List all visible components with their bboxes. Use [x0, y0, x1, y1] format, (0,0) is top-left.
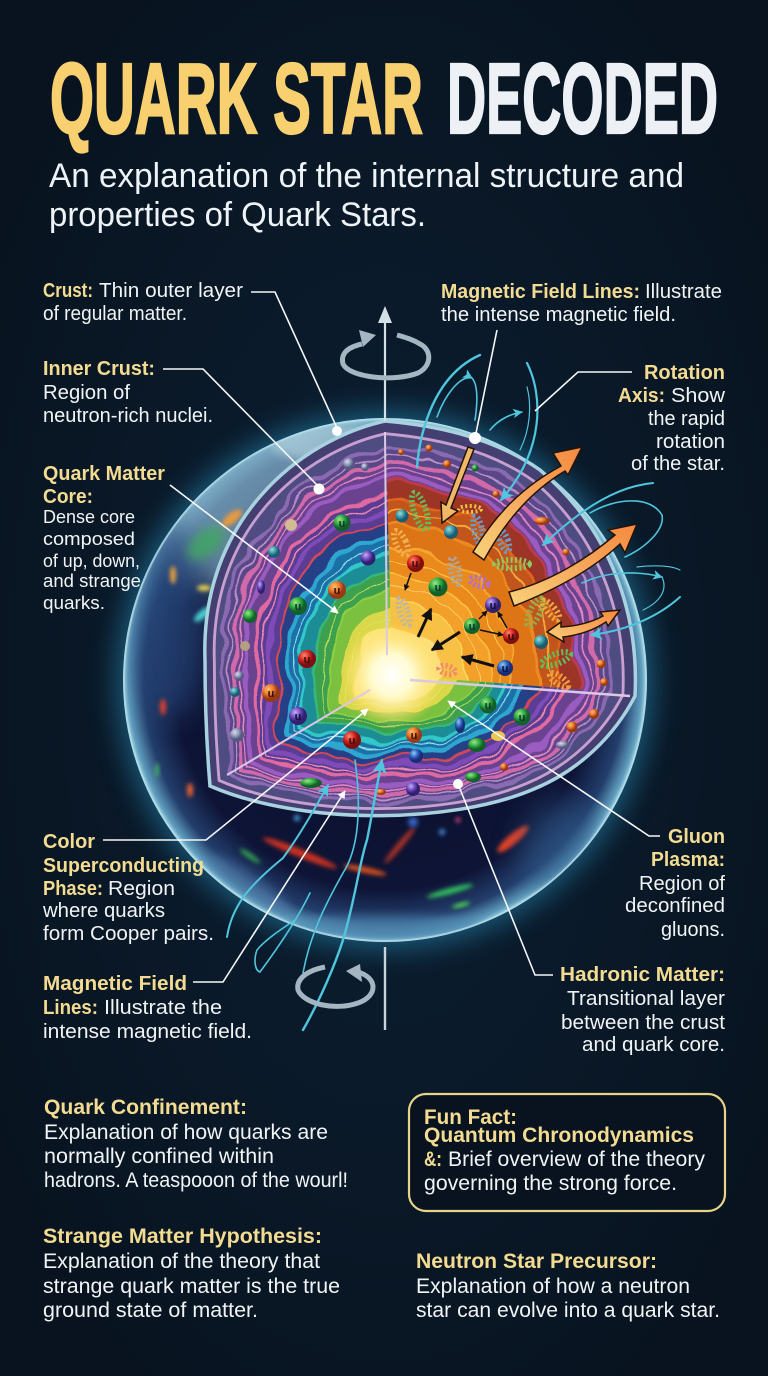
- upper magnetic field leader: [469, 330, 497, 444]
- label: quark matter core: Core:: [43, 486, 93, 508]
- label: inner crust: [43, 358, 213, 427]
- lower magnetic field leader: [193, 791, 345, 982]
- box text: [424, 1106, 706, 1195]
- note: quark confinement: Quark Confinement:: [44, 1096, 247, 1119]
- label: quark matter core: composed: [43, 529, 135, 549]
- label: quark matter core: of up, down,: [43, 551, 140, 571]
- upper rotation ring: [342, 330, 429, 378]
- note: quark confinement: [44, 1096, 348, 1192]
- note: strange matter hypothesis: Explanation of the theory that: [43, 1250, 320, 1273]
- particle letters: u: [268, 688, 274, 700]
- box text: Brief overview of the theory: [448, 1148, 706, 1171]
- note: quark confinement: hadrons. A teaspooon of the wourl!: [44, 1169, 348, 1192]
- particle letters: [268, 518, 525, 747]
- label: crust: Thin outer layer: [99, 280, 243, 302]
- gluon ribbons: [391, 491, 572, 690]
- particle letters: u: [485, 700, 491, 712]
- label: crust: [43, 280, 243, 325]
- crust leader: [251, 292, 342, 436]
- label: magnetic field lines right: [441, 281, 722, 326]
- star cross-section illustration: [117, 355, 680, 1030]
- label: gluon plasma: deconfined: [625, 895, 725, 917]
- note: strange matter hypothesis: [43, 1225, 340, 1322]
- label: inner crust: Region of: [43, 382, 130, 404]
- cut-away wedge: [205, 421, 635, 816]
- double-headed arrow: [547, 610, 620, 642]
- rotation axis leader: [535, 372, 632, 411]
- particle letters: u: [349, 735, 355, 747]
- particle letters: u: [339, 518, 345, 530]
- label: magnetic field lines left: [43, 973, 252, 1043]
- box text: Fun Fact:: [424, 1106, 517, 1129]
- label: inner crust: Inner Crust:: [43, 358, 155, 380]
- note: quark confinement: normally confined within: [44, 1145, 274, 1168]
- label: hadronic matter: Transitional layer: [567, 988, 725, 1010]
- outer glow: [117, 412, 653, 948]
- label: hadronic matter: and quark core.: [582, 1034, 725, 1056]
- particle letters: u: [334, 585, 340, 597]
- label: magnetic field lines left: intense magnetic field.: [43, 1021, 252, 1043]
- label: quark matter core: Dense core: [43, 507, 135, 527]
- label: color superconducting phase: Phase:: [43, 878, 103, 900]
- particle letters: u: [519, 712, 525, 724]
- particle letters: u: [508, 631, 514, 643]
- label: magnetic field lines left: Lines:: [43, 997, 98, 1019]
- label: magnetic field lines left: Magnetic Field: [43, 973, 187, 995]
- black interaction arrows: [405, 573, 507, 666]
- wedge rim: [205, 421, 635, 816]
- label: magnetic field lines right: the intense magnetic field.: [441, 304, 676, 326]
- label: quark matter core: and strange: [43, 571, 141, 591]
- particle letters: u: [502, 663, 508, 675]
- label: crust: of regular matter.: [43, 303, 187, 325]
- label: quark matter core: [43, 463, 165, 613]
- leader lines: [103, 292, 660, 982]
- note: strange matter hypothesis: ground state of matter.: [43, 1299, 258, 1322]
- particle letters: u: [295, 711, 301, 723]
- label: magnetic field lines right: Illustrate: [645, 281, 722, 303]
- lower jet arrow: [509, 524, 637, 606]
- note: neutron star precursor: [416, 1250, 720, 1322]
- box text: Quantum Chronodynamics: [424, 1124, 694, 1147]
- rotation axis with rotation rings: [298, 306, 429, 1030]
- particle letters: u: [411, 730, 417, 742]
- swirling layers: [224, 446, 611, 802]
- label: rotation axis: Show: [671, 385, 726, 407]
- note: strange matter hypothesis: strange quark matter is the true: [43, 1275, 340, 1298]
- label: gluon plasma: gluons.: [661, 919, 725, 941]
- label: color superconducting phase: Superconducting: [43, 855, 204, 877]
- note: quark confinement: Explanation of how quarks are: [44, 1121, 328, 1144]
- note: neutron star precursor: star can evolve into a quark star.: [416, 1299, 720, 1322]
- quark matter core leader: [170, 485, 338, 613]
- label: inner crust: neutron-rich nuclei.: [43, 405, 213, 427]
- orange hot sector: [387, 476, 584, 690]
- label: hadronic matter: Hadronic Matter:: [560, 964, 725, 986]
- title: QUARK STAR: [50, 43, 423, 155]
- axis upper segment: [378, 306, 392, 421]
- particle letters: u: [412, 558, 418, 570]
- inner crust leader: [163, 369, 324, 494]
- label: color superconducting phase: [42, 831, 214, 945]
- particle letters: u: [435, 582, 441, 594]
- sphere shell: [123, 415, 647, 942]
- label: quark matter core: Quark Matter: [43, 463, 165, 485]
- upper jet arrow: [473, 447, 582, 560]
- label: hadronic matter: between the crust: [561, 1012, 725, 1034]
- subtitle: An explanation of the internal structure and: [49, 157, 684, 195]
- box outline: [409, 1094, 725, 1211]
- box text: governing the strong force.: [424, 1172, 677, 1195]
- color superconducting leader: [103, 709, 368, 840]
- label: gluon plasma: [625, 826, 725, 941]
- label: gluon plasma: Gluon: [668, 826, 725, 848]
- subtitle: properties of Quark Stars.: [49, 196, 426, 234]
- note: neutron star precursor: Neutron Star Precursor:: [416, 1250, 657, 1273]
- hadronic matter leader: [453, 779, 553, 975]
- particle letters: u: [490, 600, 496, 612]
- blazing core: [340, 623, 444, 727]
- particle letters: u: [304, 654, 310, 666]
- inbound tan arrow: [441, 447, 474, 523]
- lower rotation ring: [298, 964, 373, 1006]
- axis lower segment: [384, 947, 386, 1030]
- rim highlight: [124, 419, 646, 941]
- quark particles: [230, 444, 608, 796]
- label: rotation axis: [618, 362, 726, 475]
- label: rotation axis: Axis:: [618, 385, 665, 407]
- label: color superconducting phase: Region: [108, 878, 175, 900]
- label: rotation axis: Rotation: [644, 362, 725, 384]
- label: gluon plasma: Plasma:: [651, 849, 725, 871]
- fun fact box: [409, 1094, 725, 1211]
- label: magnetic field lines left: Illustrate the: [104, 997, 222, 1019]
- particle letters: u: [469, 621, 475, 633]
- gluon plasma leader: [448, 701, 660, 836]
- label: color superconducting phase: form Cooper pairs.: [43, 923, 214, 945]
- note: strange matter hypothesis: Strange Matter Hypothesis:: [43, 1225, 322, 1248]
- note: neutron star precursor: Explanation of how a neutron: [416, 1275, 690, 1298]
- label: color superconducting phase: Color: [43, 831, 95, 853]
- magnetic field lines: [227, 355, 680, 1030]
- label: hadronic matter: [560, 964, 725, 1056]
- crust band: [214, 434, 623, 809]
- orange energy arrows: [441, 447, 637, 642]
- wedge face edges: [227, 432, 630, 775]
- label: quark matter core: quarks.: [43, 593, 105, 613]
- label: crust: Crust:: [43, 280, 93, 302]
- label: rotation axis: of the star.: [631, 453, 725, 475]
- particle letters: u: [295, 601, 301, 613]
- subtitle: [49, 157, 684, 234]
- label: rotation axis: the rapid: [648, 408, 725, 430]
- label: gluon plasma: Region of: [639, 873, 725, 895]
- label: magnetic field lines right: Magnetic Field Lines:: [441, 281, 640, 303]
- box text: &:: [424, 1148, 442, 1171]
- label: rotation axis: rotation: [656, 431, 725, 453]
- label: color superconducting phase: where quarks: [42, 900, 165, 922]
